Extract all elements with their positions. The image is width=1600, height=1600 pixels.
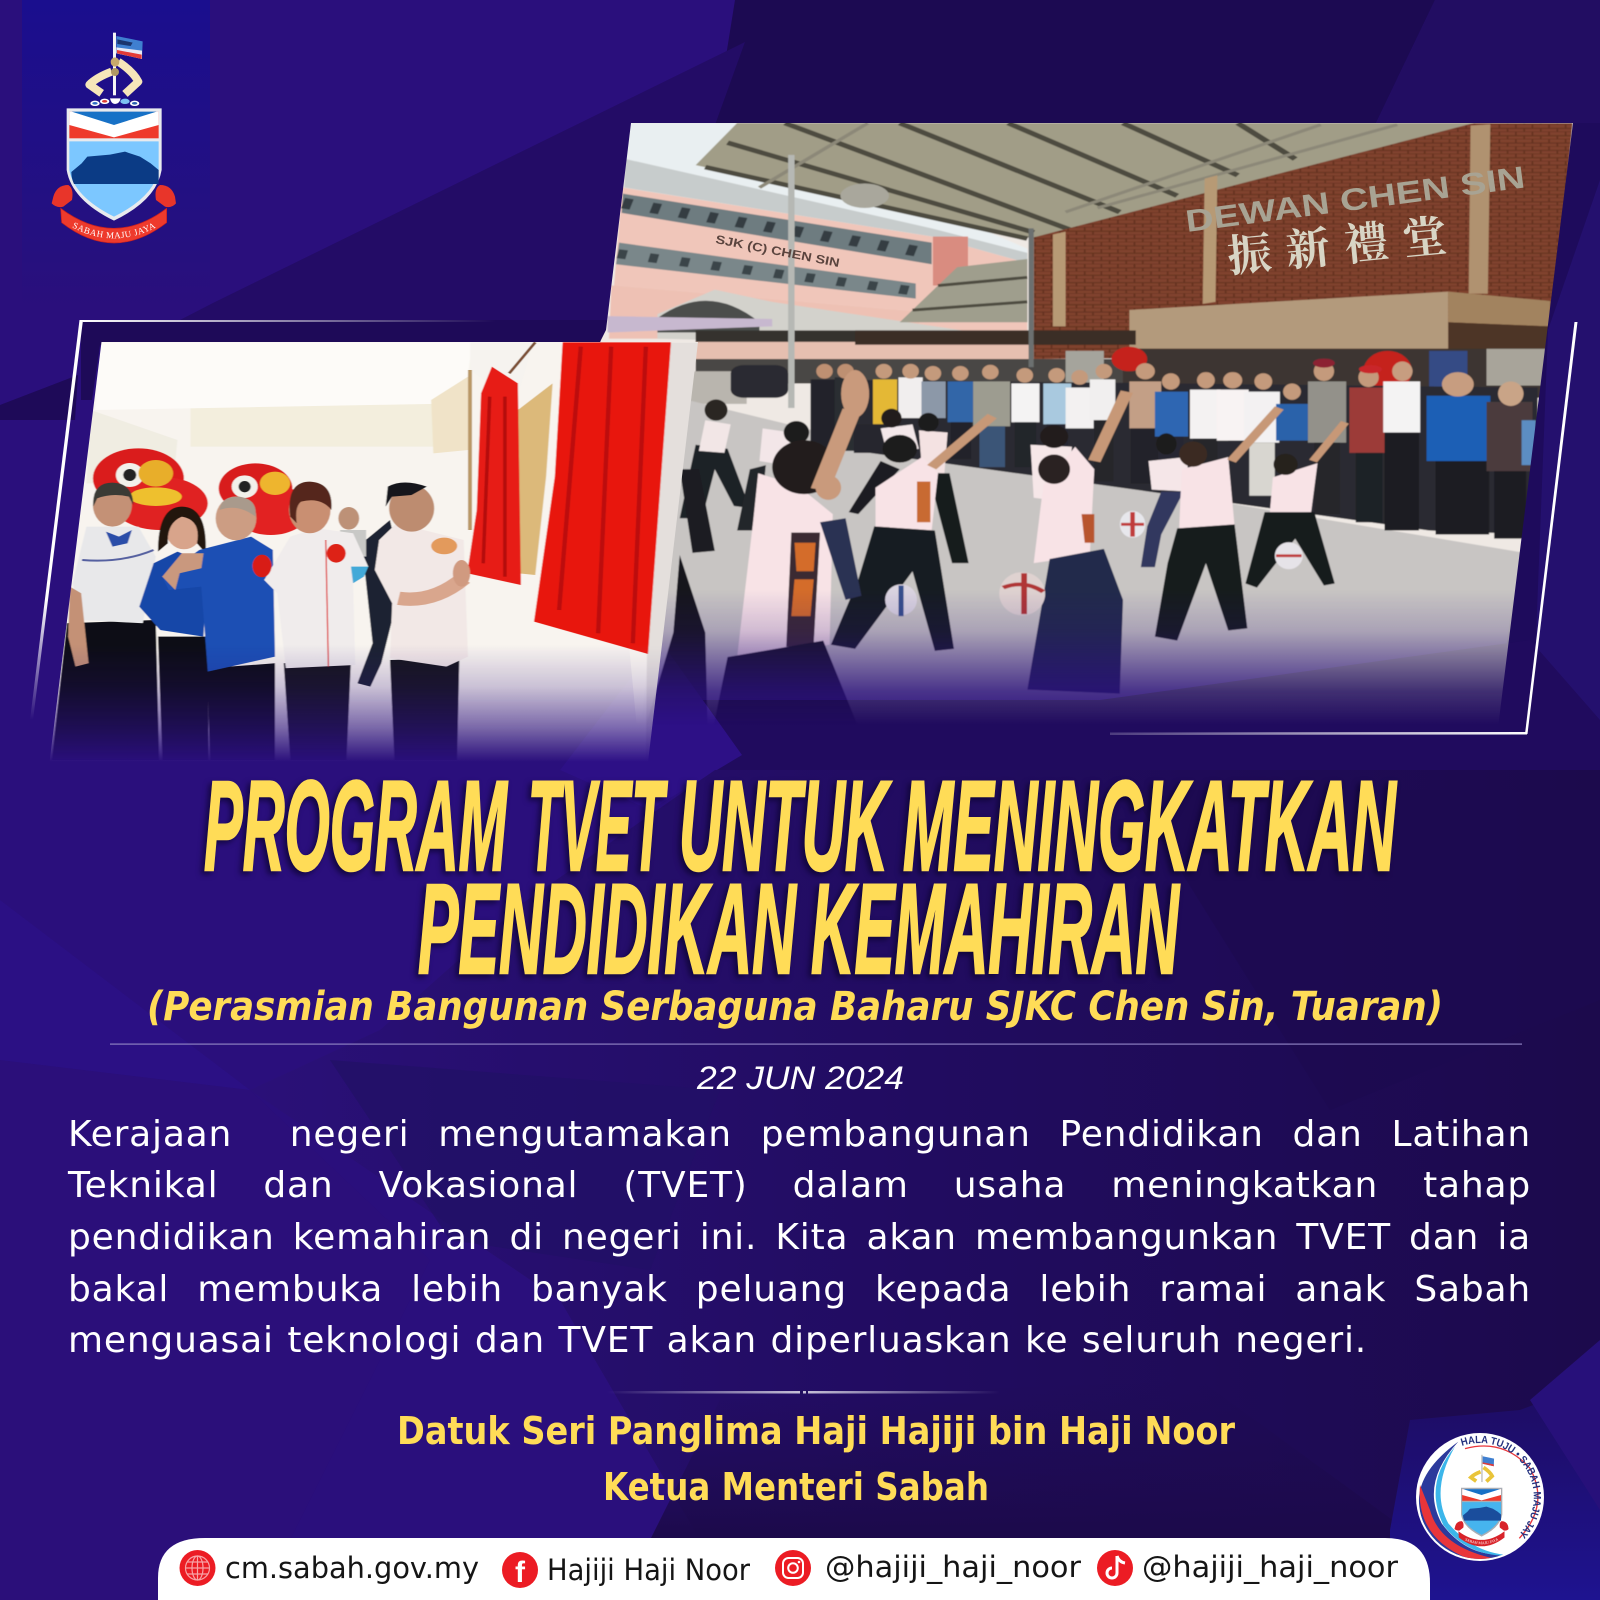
back-row pupils [680,445,750,518]
guest 4 [284,662,351,760]
main title [204,755,1397,1001]
main title: KEMAHIRAN [811,858,1180,1001]
instagram handle: @hajiji_haji_noor [825,1550,1081,1584]
sign: DEWAN CHEN SIN: DEWAN CHEN SIN [1183,160,1527,239]
body paragraph: pendidikan kemahiran di negeri ini. Kita akan membangunkan TVET dan ia [68,1217,1531,1258]
photo frame: white outline [30,320,1578,735]
body paragraph: bakal membuka lebih banyak peluang kepada lebih ramai anak Sabah [68,1269,1531,1310]
body paragraph: Kerajaan negeri mengutamakan pembangunan Pendidikan dan Latihan [68,1114,1531,1155]
icon: tiktok [1097,1550,1133,1586]
icon: facebook: f [515,1556,526,1589]
motto ribbon [61,208,167,243]
main title: PROGRAM [204,755,508,898]
date: 22 JUN 2024 [696,1060,904,1096]
gold plaque [518,383,553,575]
badge crest [1454,1454,1508,1546]
speaker name: Datuk Seri Panglima Haji Hajiji bin Haji Noor [397,1409,1235,1453]
flag pole and flag [113,33,116,95]
ground [691,370,748,404]
lion dance heads [92,448,185,490]
subtitle: (Perasmian Bangunan Serbaguna Baharu SJKC Chen Sin, Tuaran) [147,984,1443,1030]
divider line [110,1044,1522,1045]
guest 3 [207,663,275,760]
website: cm.sabah.gov.my [225,1551,479,1585]
contact bar [158,1538,1430,1600]
kid in black trousers [1179,457,1235,530]
motto text: SABAH MAJU JAYA [72,222,156,238]
guest 5 [390,658,459,760]
red curtain right [534,342,671,654]
badge: Hala Tuju Sabah Maju Jaya [1416,1433,1544,1561]
icon: facebook [502,1552,538,1589]
pupils in white jerseys [638,370,1345,750]
body paragraph: menguasai teknologi dan TVET akan diperluaskan ke seluruh negeri. [68,1320,1367,1361]
kid with ball [1034,447,1094,563]
room [50,342,698,759]
sign: Chinese hall name: 振新禮堂 [1224,200,1449,285]
guest behind, dark uniform [357,520,393,687]
facebook name: Hajiji Haji Noor [547,1553,750,1587]
guest 1 [52,620,159,760]
sky and building [600,123,1573,710]
badge ring text: HALA TUJU • SABAH MAJU JAYA [1460,1436,1542,1539]
ornament divider [607,1390,1000,1395]
sign: SJK (C) CHEN SIN: SJK (C) CHEN SIN [714,232,841,270]
main title: TVET [528,755,668,898]
badge crest: SABAH MAJU JAYA [1465,1538,1498,1544]
brick hall wall [1034,123,1573,359]
main title: UNTUK [679,755,892,898]
main title: PENDIDIKAN [418,858,797,1001]
swoosh [1419,1442,1538,1563]
icon: globe [180,1550,216,1586]
guest 2 [158,637,209,760]
logo: Sabah state crest [52,32,176,244]
photo: plaque unveiling [50,342,698,759]
crowd of guests [810,359,1538,539]
stones [90,101,100,106]
red curtain left [467,367,521,585]
kid centre-left [876,457,938,530]
photo: school hall with pupils [600,123,1573,717]
speaker role: Ketua Menteri Sabah [603,1465,989,1509]
kid in front [737,473,833,657]
icon: instagram [775,1550,811,1586]
kid far right [1270,463,1318,514]
body paragraph: Teknikal dan Vokasional (TVET) dalam usaha meningkatkan tahap [68,1165,1531,1206]
tiktok handle: @hajiji_haji_noor [1142,1550,1398,1584]
arms [89,72,112,93]
shield [67,108,162,221]
